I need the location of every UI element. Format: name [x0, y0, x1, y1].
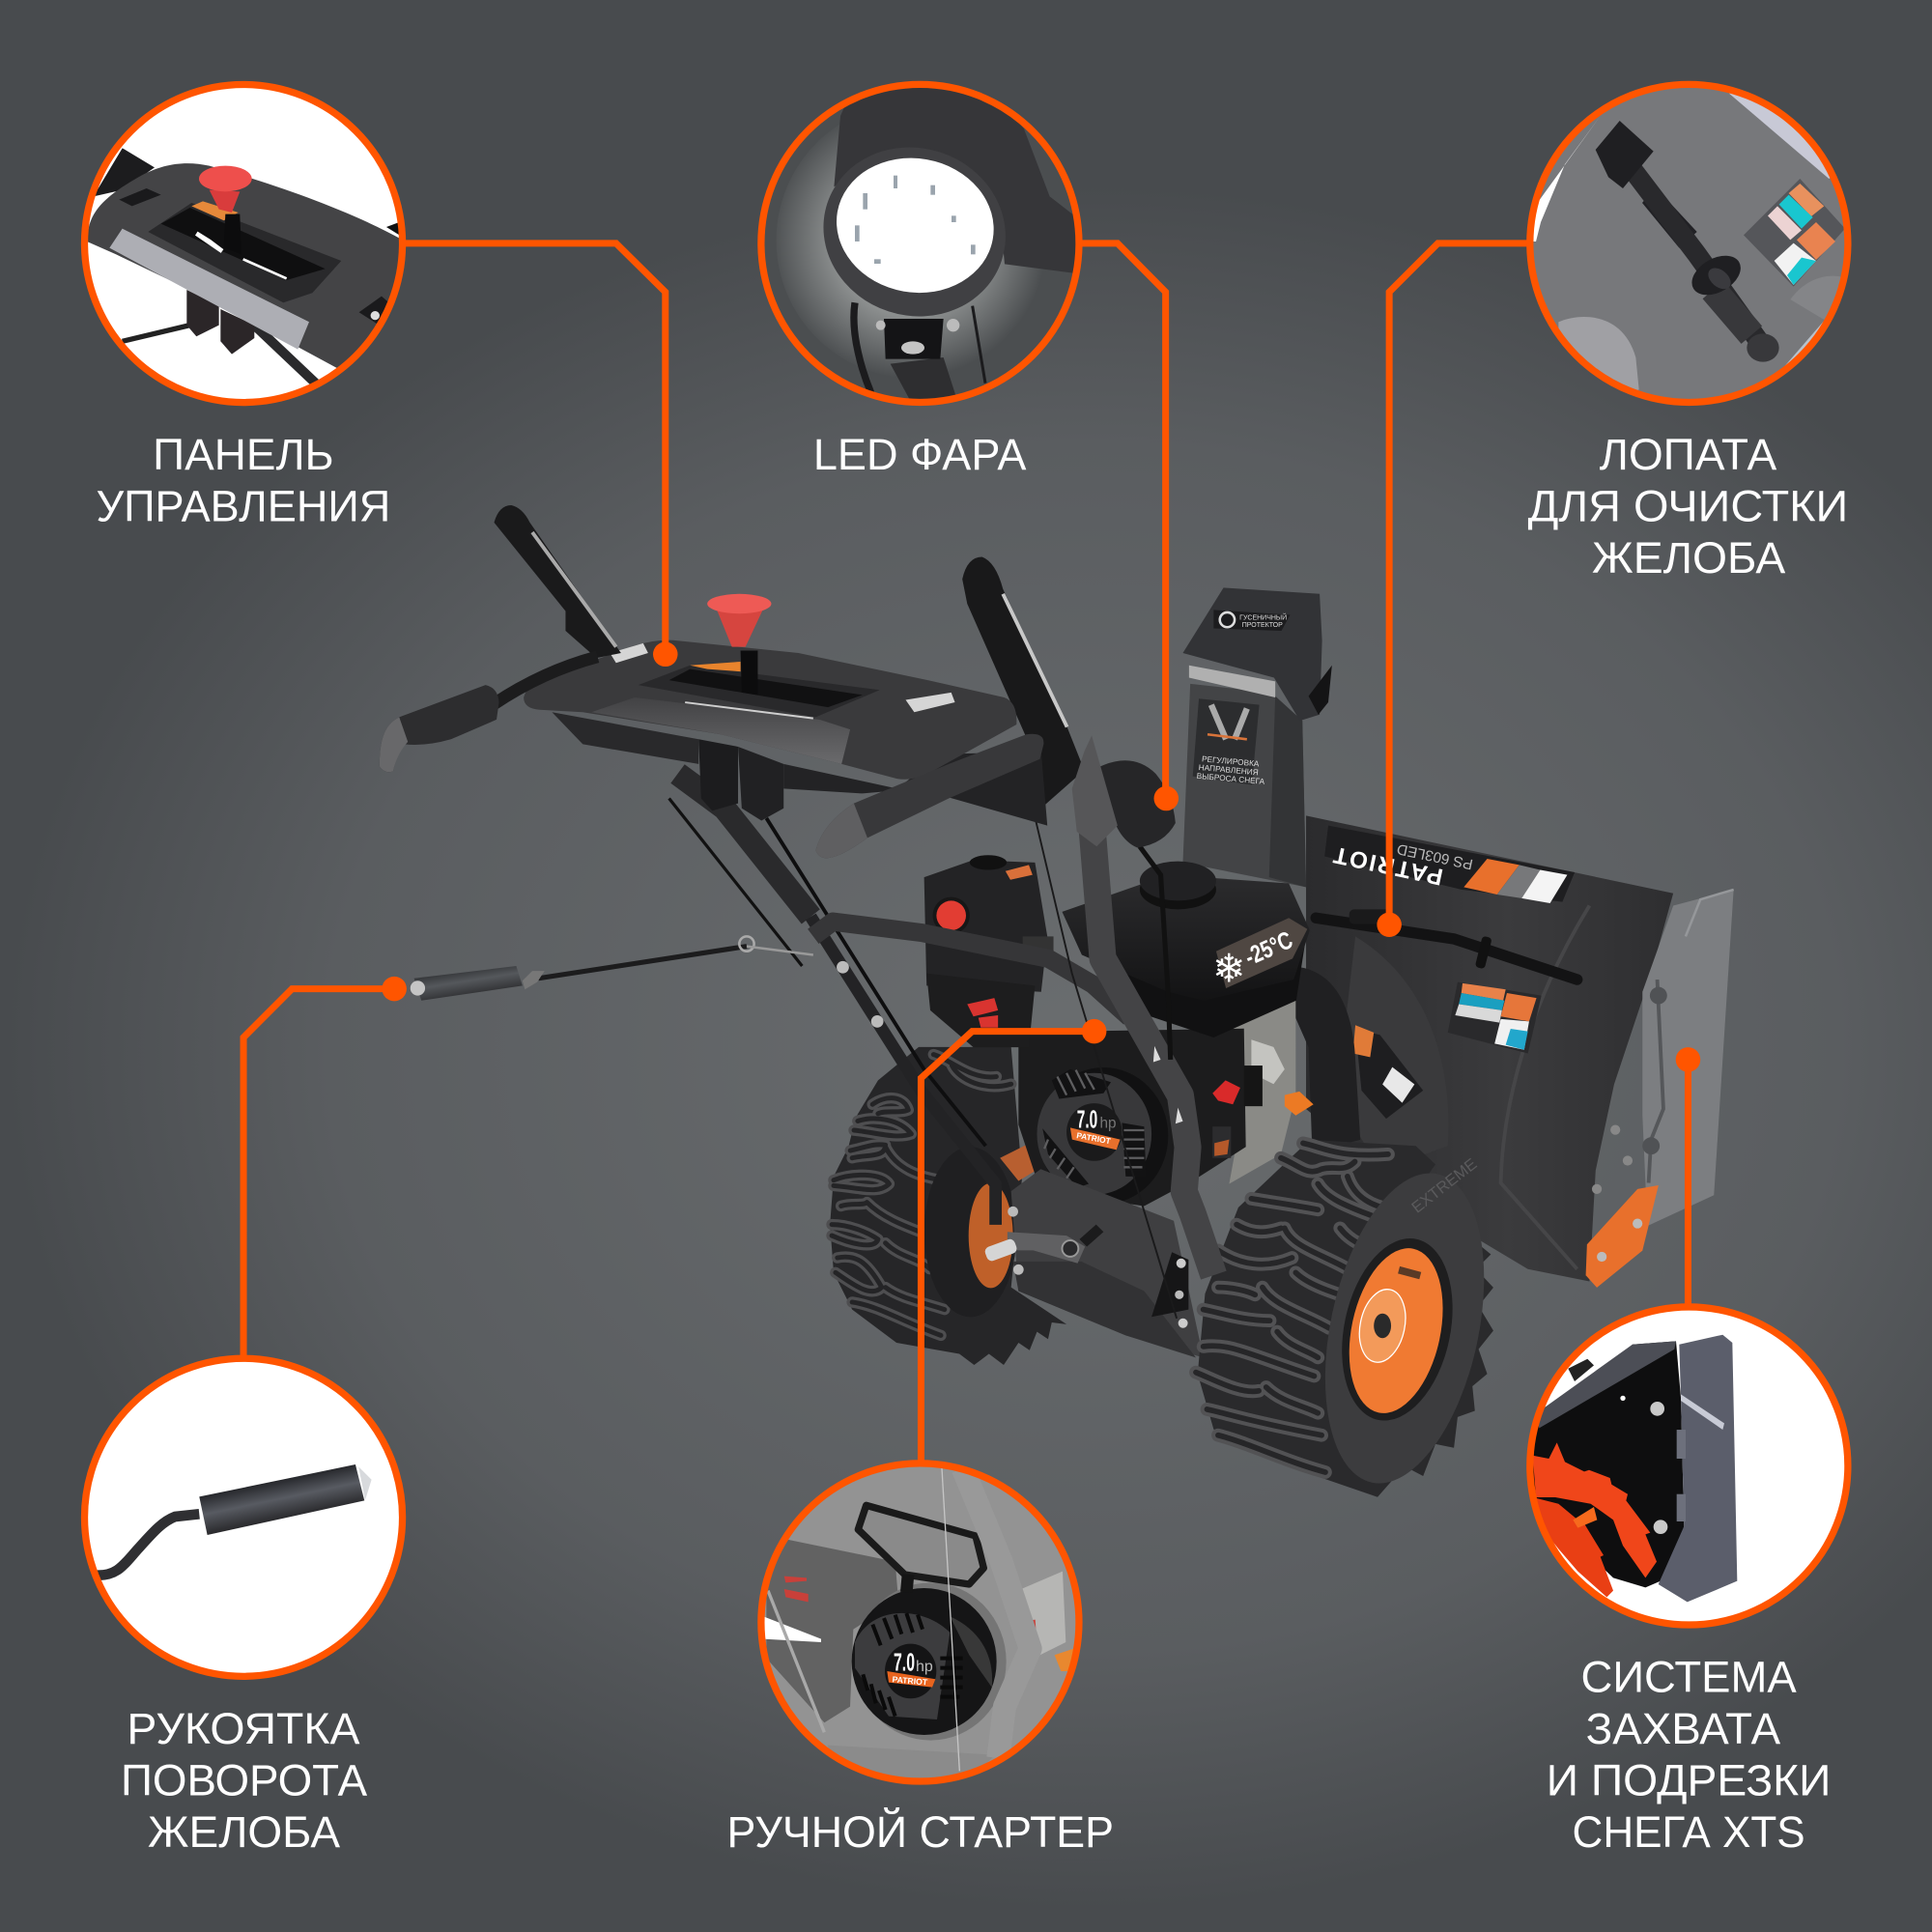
callout line: LED headlight [1078, 243, 1179, 810]
carburettor [1226, 984, 1295, 1184]
sticker: model name: PS 603LED [1396, 840, 1474, 872]
chute label: НАПРАВЛЕНИЯ [1198, 762, 1259, 777]
headlight [1100, 760, 1176, 848]
orange skid shoe [1586, 1125, 1659, 1288]
left grip [380, 657, 598, 772]
label: LED headlight: LED ФАРА [813, 430, 1027, 479]
recoil cover: hp [1100, 1115, 1117, 1131]
label: chute shovel [1528, 430, 1848, 582]
black pipe behind engine [1282, 967, 1360, 1152]
label: chute shovel: ЛОПАТА [1600, 430, 1777, 479]
frame tubes [669, 774, 1213, 1319]
right lever [962, 557, 1118, 846]
sticker: model name [1324, 826, 1575, 903]
chute label [1193, 698, 1267, 786]
chute [1182, 587, 1332, 887]
label: chute rotation handle: ПОВОРОТА [121, 1755, 368, 1804]
XTS side plate [1642, 890, 1734, 1226]
snow blower machine [380, 505, 1734, 1498]
label: XTS system: И ПОДРЕЗКИ [1547, 1755, 1831, 1804]
circle: chute cleaning shovel [1526, 81, 1851, 406]
auger housing [1306, 815, 1673, 1282]
recoil cover: 7.0 [1077, 1104, 1097, 1133]
callout line: control panel [403, 243, 678, 667]
callout line: manual starter [921, 1019, 1106, 1465]
chute rotation rod on machine [411, 936, 813, 1001]
sticker: drum [1353, 1025, 1423, 1119]
chute lid sticker: ПРОТЕКТОР [1242, 622, 1283, 629]
front wheel: EXTREME [1408, 1154, 1480, 1217]
fuel tank with label: -25°C [1240, 926, 1296, 971]
callout line: chute rotation handle [243, 977, 407, 1360]
engine block [1018, 1029, 1246, 1206]
recoil cover [1037, 1067, 1168, 1205]
label: chute shovel: ДЛЯ ОЧИСТКИ [1528, 482, 1848, 531]
panel brackets [698, 739, 783, 820]
sticker: warnings [1448, 982, 1542, 1054]
red speed knob [707, 594, 771, 695]
label: chute rotation handle: ЖЕЛОБА [148, 1807, 341, 1857]
label: chute rotation handle: РУКОЯТКА [127, 1704, 360, 1753]
circle: manual starter: hp [916, 1659, 933, 1675]
chute lid sticker [1213, 610, 1290, 631]
circle: LED headlight [757, 81, 1083, 406]
circle: control panel [81, 81, 406, 406]
callout line: chute scraper [1377, 243, 1531, 937]
label: chute shovel: ЖЕЛОБА [1592, 533, 1786, 582]
label: control panel: УПРАВЛЕНИЯ [96, 482, 390, 531]
chute lid sticker: ГУСЕНИЧНЫЙ [1239, 613, 1287, 622]
red choke [1212, 1080, 1240, 1104]
recoil cover: PATRIOT [1076, 1130, 1112, 1146]
label: control panel [96, 430, 390, 531]
label: manual starter: РУЧНОЙ СТАРТЕР [727, 1807, 1114, 1857]
fuel shutoff [1285, 1092, 1314, 1116]
label: chute rotation handle [121, 1704, 368, 1857]
label: XTS system: СИСТЕМА [1580, 1652, 1797, 1701]
engine [1018, 984, 1314, 1206]
fuel tank with label [1062, 862, 1310, 1037]
label: XTS system: ЗАХВАТА [1586, 1704, 1781, 1753]
left control box [924, 855, 1054, 1047]
rear wheel [830, 1047, 1066, 1365]
callout line: XTS system [1676, 1047, 1700, 1309]
front wheel [1196, 1140, 1510, 1498]
circle: manual starter: 7.0 [894, 1647, 915, 1676]
circle: XTS capture system [1526, 1303, 1851, 1629]
circle: chute rotation handle [81, 1354, 406, 1680]
chute label: ВЫБРОСА СНЕГА [1196, 771, 1265, 786]
fuel tank with label: ❄ [1212, 946, 1245, 992]
lower frame box [983, 1169, 1204, 1357]
chute label: РЕГУЛИРОВКА [1202, 753, 1260, 768]
right grip [815, 734, 1043, 858]
label: XTS system: СНЕГА XTS [1573, 1807, 1805, 1857]
label: XTS system [1547, 1652, 1831, 1857]
label: control panel: ПАНЕЛЬ [153, 430, 334, 479]
chute scraper shovel on housing [1316, 909, 1577, 980]
left lever [494, 505, 621, 658]
control panel [524, 640, 1047, 826]
sticker: model name: PATRIOT [1331, 841, 1445, 890]
circle: manual starter: PATRIOT [892, 1674, 928, 1688]
circle: manual starter [757, 1460, 1083, 1785]
